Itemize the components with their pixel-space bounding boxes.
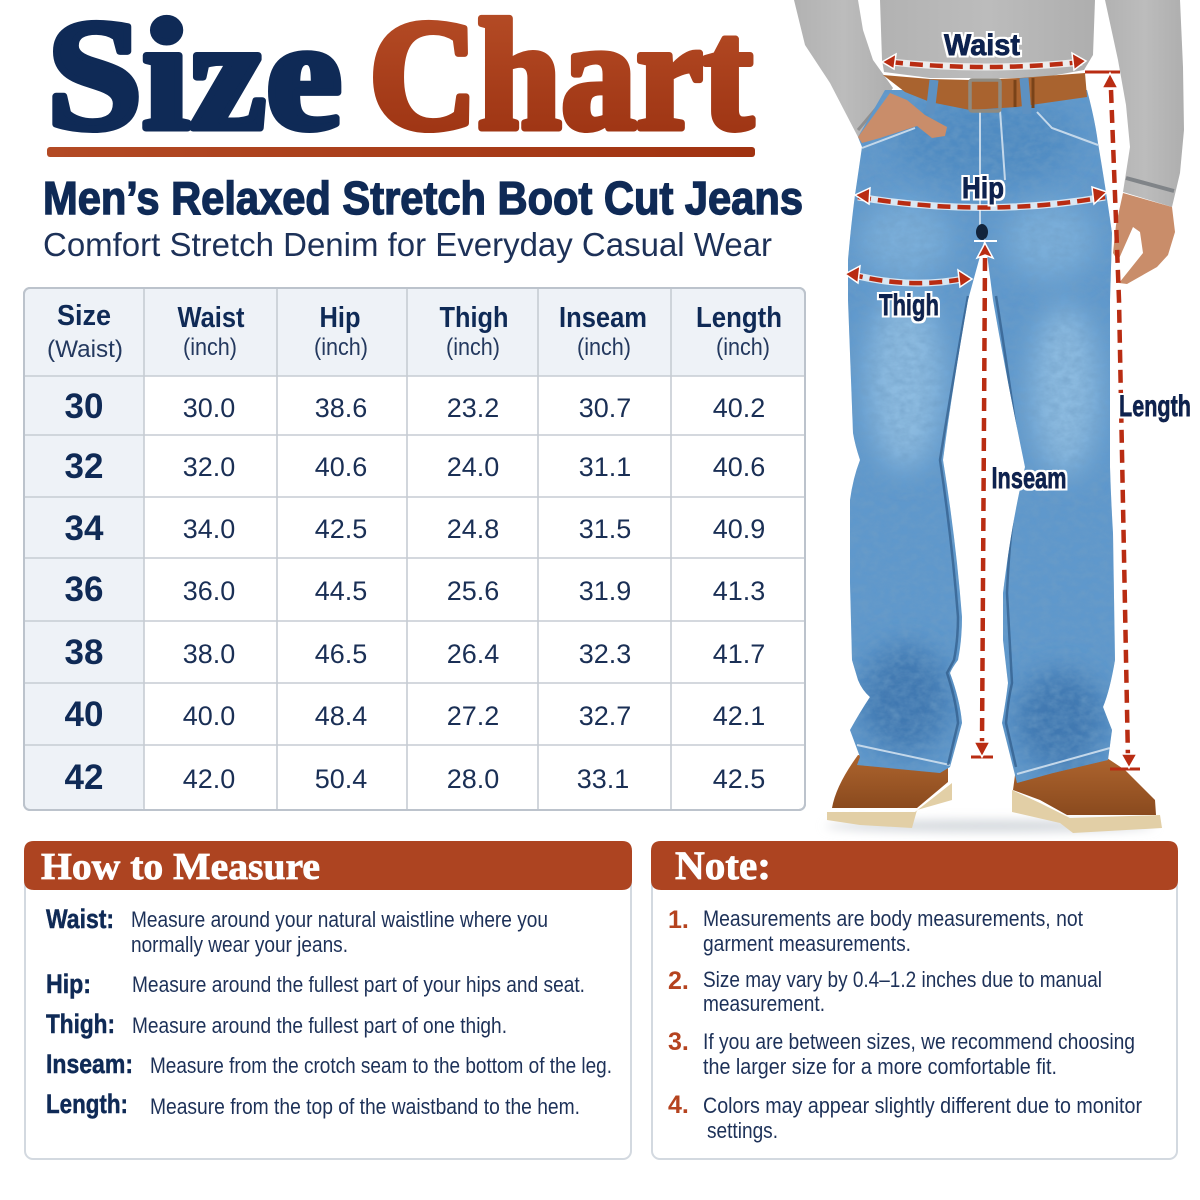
right hand bbox=[1113, 193, 1175, 284]
note 2: 2. bbox=[668, 967, 689, 995]
table header row: Waist bbox=[178, 302, 245, 334]
table row 38: 26.4 bbox=[447, 639, 499, 669]
shirt bbox=[794, 0, 1184, 207]
table row 32: 40.6 bbox=[315, 452, 367, 482]
table row 34: 42.5 bbox=[315, 514, 367, 544]
waist instruction: normally wear your jeans. bbox=[131, 932, 348, 957]
model wearing jeans bbox=[794, 0, 1191, 833]
table row 40: 40 bbox=[65, 695, 103, 734]
waist measure: Waist bbox=[944, 29, 1020, 62]
table row 32: 24.0 bbox=[447, 452, 499, 482]
table header row: (inch) bbox=[577, 334, 631, 361]
table row 42: 28.0 bbox=[447, 764, 499, 794]
table row 38 bbox=[65, 633, 765, 672]
table row 34: 34 bbox=[65, 509, 104, 548]
note 3: If you are between sizes, we recommend choosing bbox=[703, 1029, 1135, 1054]
table row 30: 30.7 bbox=[579, 393, 631, 423]
table header row: Hip bbox=[320, 302, 360, 334]
note 3: the larger size for a more comfortable fit. bbox=[703, 1054, 1057, 1079]
hip instruction: Measure around the fullest part of your hips and seat. bbox=[132, 972, 585, 997]
table header row: Thigh bbox=[440, 302, 508, 334]
table header row: Inseam bbox=[559, 302, 647, 334]
length instruction: Measure from the top of the waistband to the hem. bbox=[150, 1094, 580, 1119]
table row 38: 38 bbox=[65, 633, 103, 672]
table row 30: 38.6 bbox=[315, 393, 367, 423]
note 2 bbox=[668, 967, 1102, 1016]
inseam instruction: Measure from the crotch seam to the bottom of the leg. bbox=[150, 1053, 612, 1078]
table row 40: 32.7 bbox=[579, 701, 631, 731]
hip measure: Hip bbox=[962, 172, 1004, 205]
table row 30: 23.2 bbox=[447, 393, 499, 423]
note 1: Measurements are body measurements, not bbox=[703, 906, 1084, 931]
left boot bbox=[827, 755, 952, 828]
note 1: garment measurements. bbox=[703, 931, 911, 956]
hip measure bbox=[855, 172, 1107, 208]
belt bbox=[883, 73, 1087, 114]
how to measure header: How to Measure bbox=[41, 846, 320, 888]
table row 30: 40.2 bbox=[713, 393, 765, 423]
product subheading: Comfort Stretch Denim for Everyday Casual Wear bbox=[43, 226, 772, 263]
table row 40: 48.4 bbox=[315, 701, 367, 731]
left hand in pocket bbox=[858, 93, 947, 143]
title bbox=[47, 0, 755, 163]
table header row: Length bbox=[696, 302, 782, 334]
table row 34: 40.9 bbox=[713, 514, 765, 544]
note 4: 4. bbox=[668, 1091, 689, 1119]
note 2: Size may vary by 0.4–1.2 inches due to manual bbox=[703, 967, 1102, 992]
length measure bbox=[1085, 72, 1191, 769]
table row 36: 44.5 bbox=[315, 576, 367, 606]
table row 38: 41.7 bbox=[713, 639, 765, 669]
note 3: 3. bbox=[668, 1028, 689, 1056]
table row 42: 42.5 bbox=[713, 764, 765, 794]
table row 40: 40.0 bbox=[183, 701, 235, 731]
table row 40: 42.1 bbox=[713, 701, 765, 731]
table row 36: 36.0 bbox=[183, 576, 235, 606]
table row 34: 31.5 bbox=[579, 514, 631, 544]
table row 34 bbox=[65, 509, 765, 548]
note 2: measurement. bbox=[703, 991, 825, 1016]
table row 42: 42 bbox=[65, 758, 103, 797]
table row 42: 50.4 bbox=[315, 764, 367, 794]
table row 32: 32.0 bbox=[183, 452, 235, 482]
right boot bbox=[1012, 758, 1162, 833]
table row 34: 24.8 bbox=[447, 514, 499, 544]
table row 40: 27.2 bbox=[447, 701, 499, 731]
thigh instruction: Measure around the fullest part of one thigh. bbox=[132, 1013, 507, 1038]
table header row bbox=[47, 300, 782, 363]
inseam measure bbox=[971, 241, 1066, 757]
table row 36: 25.6 bbox=[447, 576, 499, 606]
table row 38: 38.0 bbox=[183, 639, 235, 669]
table row 30: 30.0 bbox=[183, 393, 235, 423]
waist measure bbox=[882, 29, 1086, 70]
table row 42 bbox=[65, 758, 765, 797]
floor shadow bbox=[825, 820, 1155, 832]
how to measure header bbox=[24, 841, 632, 890]
thigh measure bbox=[845, 266, 972, 322]
thigh instruction bbox=[46, 1009, 507, 1039]
table row 36: 36 bbox=[65, 570, 103, 609]
waist instruction: Waist: bbox=[46, 904, 114, 934]
size table bbox=[24, 288, 805, 810]
table header row: (inch) bbox=[446, 334, 500, 361]
length instruction bbox=[46, 1089, 580, 1119]
note 4: settings. bbox=[707, 1118, 778, 1143]
note header bbox=[651, 841, 1178, 890]
table header row: (Waist) bbox=[47, 336, 123, 363]
inseam instruction bbox=[46, 1049, 612, 1079]
jeans bbox=[840, 80, 1125, 790]
inseam instruction: Inseam: bbox=[46, 1049, 133, 1079]
table row 38: 46.5 bbox=[315, 639, 367, 669]
table row 38: 32.3 bbox=[579, 639, 631, 669]
table header row: Size bbox=[57, 300, 111, 332]
note header: Note: bbox=[675, 843, 771, 888]
table row 32 bbox=[65, 447, 765, 486]
length instruction: Length: bbox=[46, 1089, 128, 1119]
table row 36: 31.9 bbox=[579, 576, 631, 606]
note 1 bbox=[668, 906, 1084, 956]
note 1: 1. bbox=[668, 906, 689, 934]
note 4: Colors may appear slightly different due to monitor bbox=[703, 1093, 1142, 1118]
hip instruction bbox=[46, 969, 585, 999]
table row 30: 30 bbox=[65, 387, 103, 426]
product heading: Men’s Relaxed Stretch Boot Cut Jeans bbox=[43, 172, 803, 224]
table row 36: 41.3 bbox=[713, 576, 765, 606]
table row 32: 32 bbox=[65, 447, 103, 486]
inseam measure: Inseam bbox=[992, 462, 1066, 495]
panel: note bbox=[651, 841, 1178, 1159]
hip instruction: Hip: bbox=[46, 969, 91, 999]
thigh instruction: Thigh: bbox=[46, 1009, 115, 1039]
panel: how to measure bbox=[24, 841, 632, 1159]
thigh measure: Thigh bbox=[879, 289, 939, 322]
table header row: (inch) bbox=[314, 334, 368, 361]
waist instruction bbox=[46, 904, 548, 957]
table row 32: 31.1 bbox=[579, 452, 631, 482]
note 4 bbox=[668, 1091, 1142, 1143]
table row 36 bbox=[65, 570, 765, 609]
table row 34: 34.0 bbox=[183, 514, 235, 544]
note 3 bbox=[668, 1028, 1135, 1079]
table row 42: 42.0 bbox=[183, 764, 235, 794]
table row 32: 40.6 bbox=[713, 452, 765, 482]
table row 42: 33.1 bbox=[577, 764, 629, 794]
table row 30 bbox=[65, 387, 765, 426]
table header row: (inch) bbox=[716, 334, 770, 361]
waist instruction: Measure around your natural waistline where you bbox=[131, 907, 548, 932]
table row 40 bbox=[65, 695, 765, 734]
table header row: (inch) bbox=[183, 334, 237, 361]
